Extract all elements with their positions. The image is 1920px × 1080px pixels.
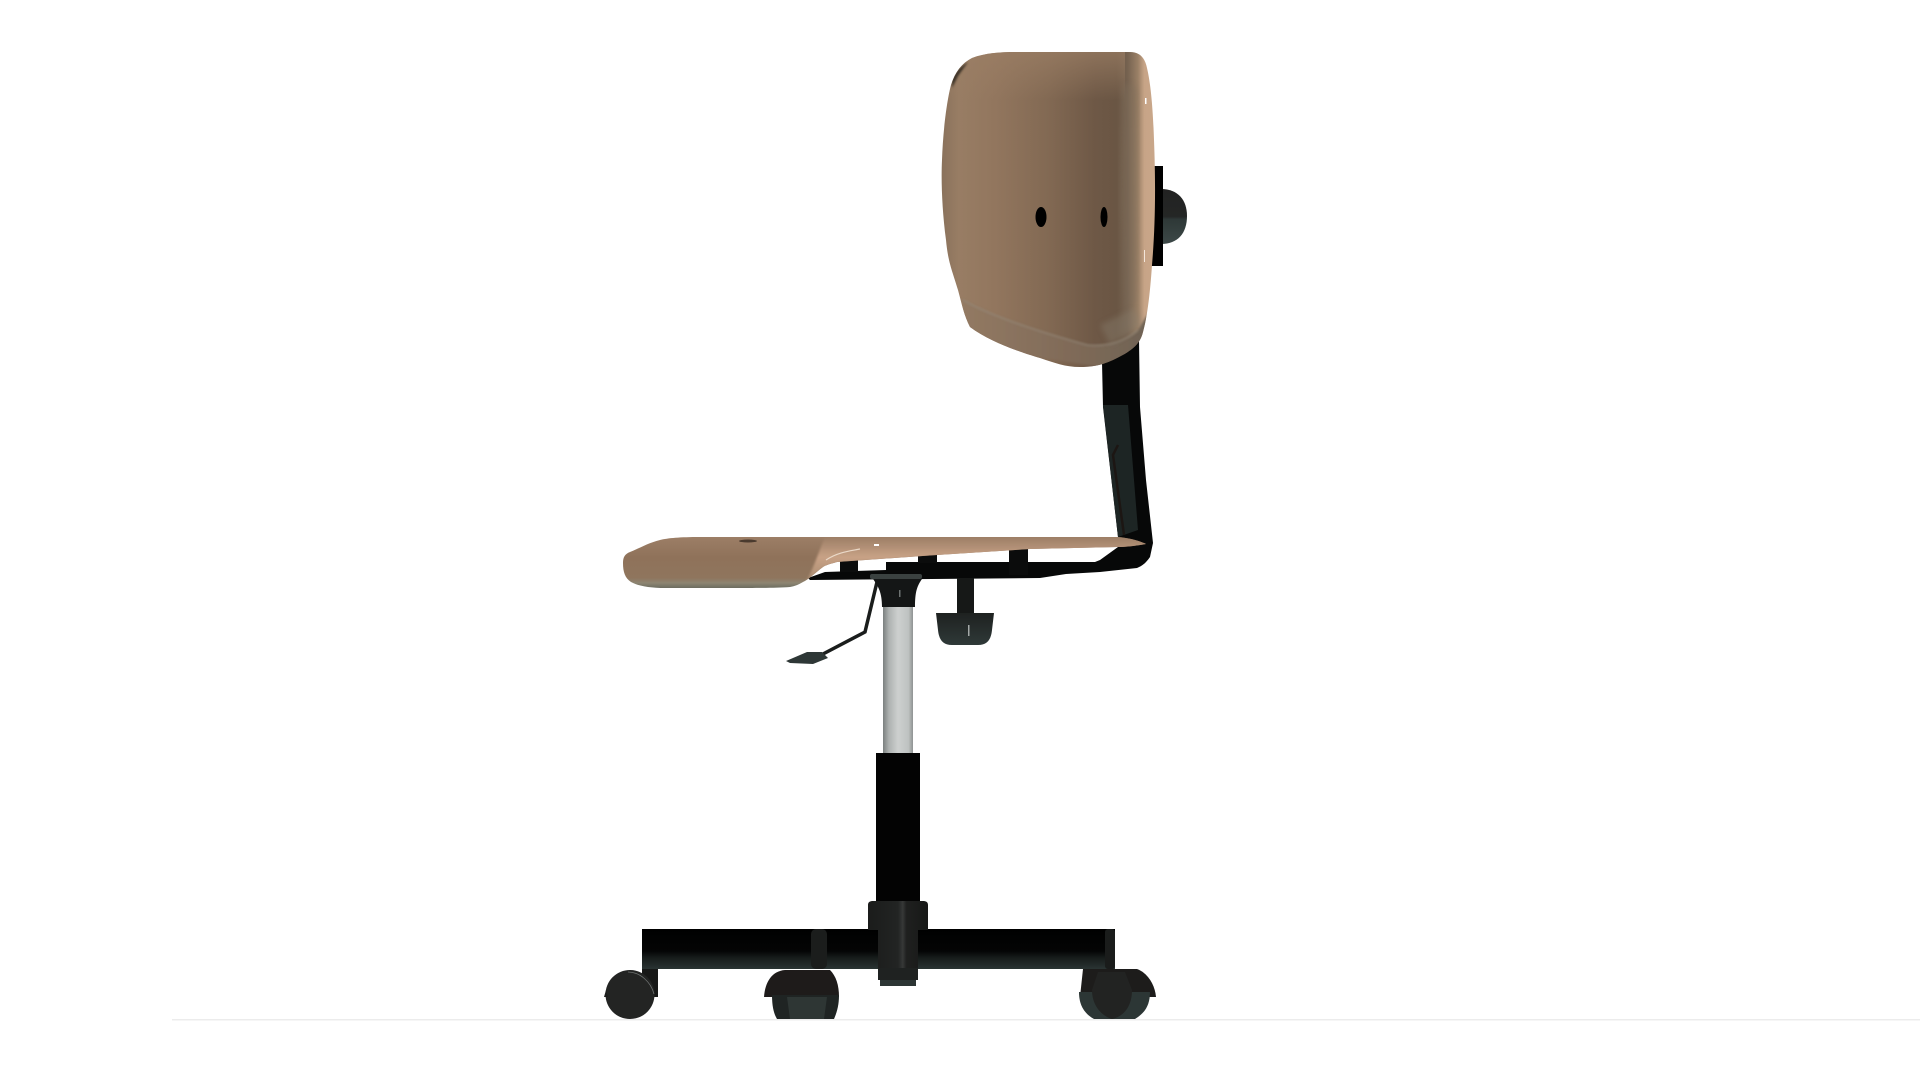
arm joint near (811, 929, 827, 969)
mounting holes (1036, 207, 1046, 227)
caster: middle (764, 970, 839, 1019)
arm joint right (1105, 929, 1115, 969)
post face (1103, 405, 1138, 537)
inner joint (882, 932, 895, 968)
chrome gas cylinder (883, 605, 913, 755)
lever handle (786, 652, 828, 664)
height adjust lever (786, 582, 877, 664)
inner recess shading (1120, 84, 1138, 318)
hub collar (868, 901, 928, 969)
right lip highlights (1145, 98, 1146, 104)
tension knob (936, 578, 994, 645)
lower column sleeve (876, 753, 920, 903)
five-star base (642, 901, 1115, 986)
caster: right (1079, 969, 1156, 1019)
backrest shell (940, 50, 1155, 375)
hub lower (878, 968, 918, 980)
lower edge band (962, 306, 1147, 366)
base arms (642, 929, 1115, 969)
column top collar (870, 574, 922, 607)
adjustment knob (1161, 189, 1187, 244)
top-left dark corner (952, 62, 968, 88)
seat frame posts (840, 547, 1028, 575)
seat pan (623, 537, 1150, 588)
seat front lip (806, 537, 1150, 582)
backrest bracket and adjustment knob (1150, 166, 1187, 266)
back support post (808, 340, 1153, 580)
bracket plate (1150, 166, 1163, 266)
caster: left (604, 965, 658, 1019)
floor line (172, 1019, 1920, 1020)
hub foot (880, 980, 916, 986)
